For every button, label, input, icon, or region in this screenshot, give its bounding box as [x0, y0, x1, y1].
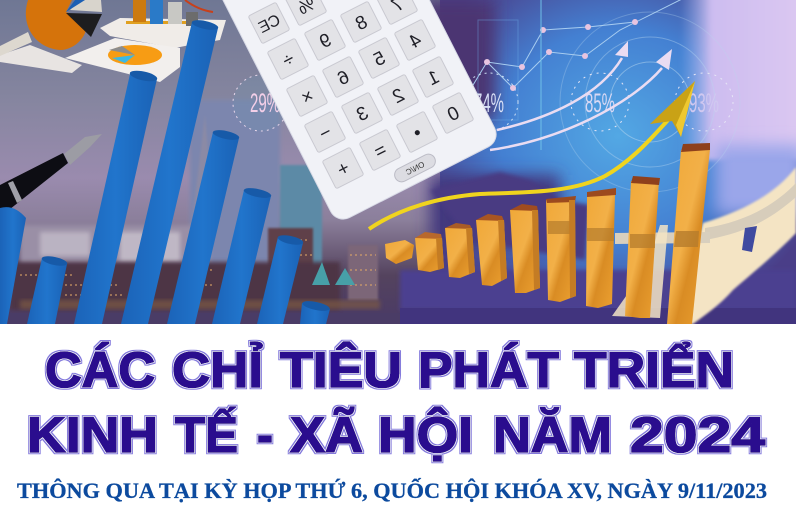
dark purple top corner	[425, 0, 495, 120]
ON/C button	[394, 154, 436, 182]
title line 2: TẾ	[175, 407, 238, 463]
gold bar 3	[445, 223, 475, 278]
calculator keys: 2	[389, 85, 408, 108]
gold bar 1	[385, 240, 414, 264]
blue bar 7	[257, 233, 304, 324]
gold bar 5	[510, 204, 540, 293]
blue bar 6	[212, 186, 272, 324]
city skyline	[0, 100, 796, 324]
calculator keys	[248, 0, 474, 189]
calculator keys: =	[371, 139, 390, 163]
gold bar chart	[385, 143, 710, 324]
gold bar 2	[415, 232, 444, 272]
calculator keys: ÷	[279, 49, 298, 72]
title line 2: NĂM	[493, 407, 612, 463]
calculator body	[222, 0, 497, 220]
calculator keys: −	[316, 121, 335, 145]
calculator keys: 8	[352, 12, 371, 35]
stat ring: 93%: 93%	[689, 88, 719, 118]
title line 2: XÃ	[290, 407, 363, 463]
gold bar 4	[476, 214, 507, 286]
calculator keys: ×	[298, 85, 317, 109]
calculator keys: 4	[406, 30, 425, 53]
calculator keys: 5	[370, 48, 389, 71]
calculator	[222, 0, 497, 220]
calculator keys: CE	[256, 12, 283, 37]
title line 1: PHÁT	[418, 342, 559, 398]
title line 1: CHỈ	[172, 342, 263, 398]
lavender growth arrows	[490, 41, 672, 150]
blue digital panel background	[440, 0, 796, 324]
calculator keys: +	[334, 157, 353, 181]
calculator keys: 3	[353, 103, 372, 126]
title line 1: TRIỂN	[574, 342, 734, 398]
dark purple hand area	[430, 175, 560, 245]
calculator keys: 6	[334, 67, 353, 90]
blue bar 1	[0, 207, 26, 324]
fountain pen	[0, 134, 102, 208]
ON/C button: ON/C	[404, 160, 426, 177]
stat ring: 29%	[233, 75, 289, 131]
stat ring: 93%	[675, 73, 733, 131]
stat ring: 74%	[473, 72, 518, 130]
gold bar 8	[625, 176, 660, 318]
title line 2: KINH	[27, 407, 158, 463]
title line 2: HỘI	[378, 406, 473, 463]
title line 1: CÁC	[45, 342, 155, 398]
blue bar 4	[121, 18, 219, 324]
stat ring: 85%	[571, 73, 629, 131]
cream paint splash	[612, 167, 796, 324]
stat ring: 85%: 85%	[585, 88, 615, 118]
paper charts on desk	[0, 18, 226, 82]
blue haze under cloud	[715, 145, 796, 215]
title line 2: -	[257, 407, 273, 463]
orange 3D pie chart	[0, 0, 102, 56]
yellow rising arrow	[369, 81, 695, 229]
blue bar 5	[167, 128, 240, 324]
stat ring: 29%: 29%	[250, 88, 280, 118]
subtitle: THÔNG QUA TẠI KỲ HỌP THỨ 6, QUỐC HỘI KHÓA XV, NGÀY 9/11/2023	[17, 478, 767, 503]
title line 2	[27, 406, 765, 463]
blue bar 2	[27, 254, 68, 324]
gold bar 6	[546, 196, 576, 302]
title line 2: 2024	[630, 407, 765, 463]
banner photo collage	[0, 0, 796, 324]
blue column bars	[0, 18, 331, 324]
blue bar 3	[74, 69, 158, 324]
calculator keys: 9	[316, 30, 335, 53]
calculator keys: 0	[444, 103, 463, 126]
gold bar 7	[586, 188, 616, 308]
stat ring: 74%: 74%	[474, 88, 504, 118]
blue bar 8	[300, 299, 331, 324]
lavender cloud	[680, 0, 796, 160]
calculator keys: •	[410, 122, 425, 144]
calculator keys: 1	[424, 67, 443, 90]
city lights	[20, 240, 376, 295]
title line 1	[45, 342, 734, 398]
digital line chart	[470, 0, 740, 192]
dusk sky background	[0, 0, 460, 324]
title line 1: TIÊU	[280, 342, 402, 398]
gold bar 9	[667, 143, 710, 324]
3D bar chart on paper	[133, 0, 213, 26]
hand silhouette	[430, 172, 590, 260]
